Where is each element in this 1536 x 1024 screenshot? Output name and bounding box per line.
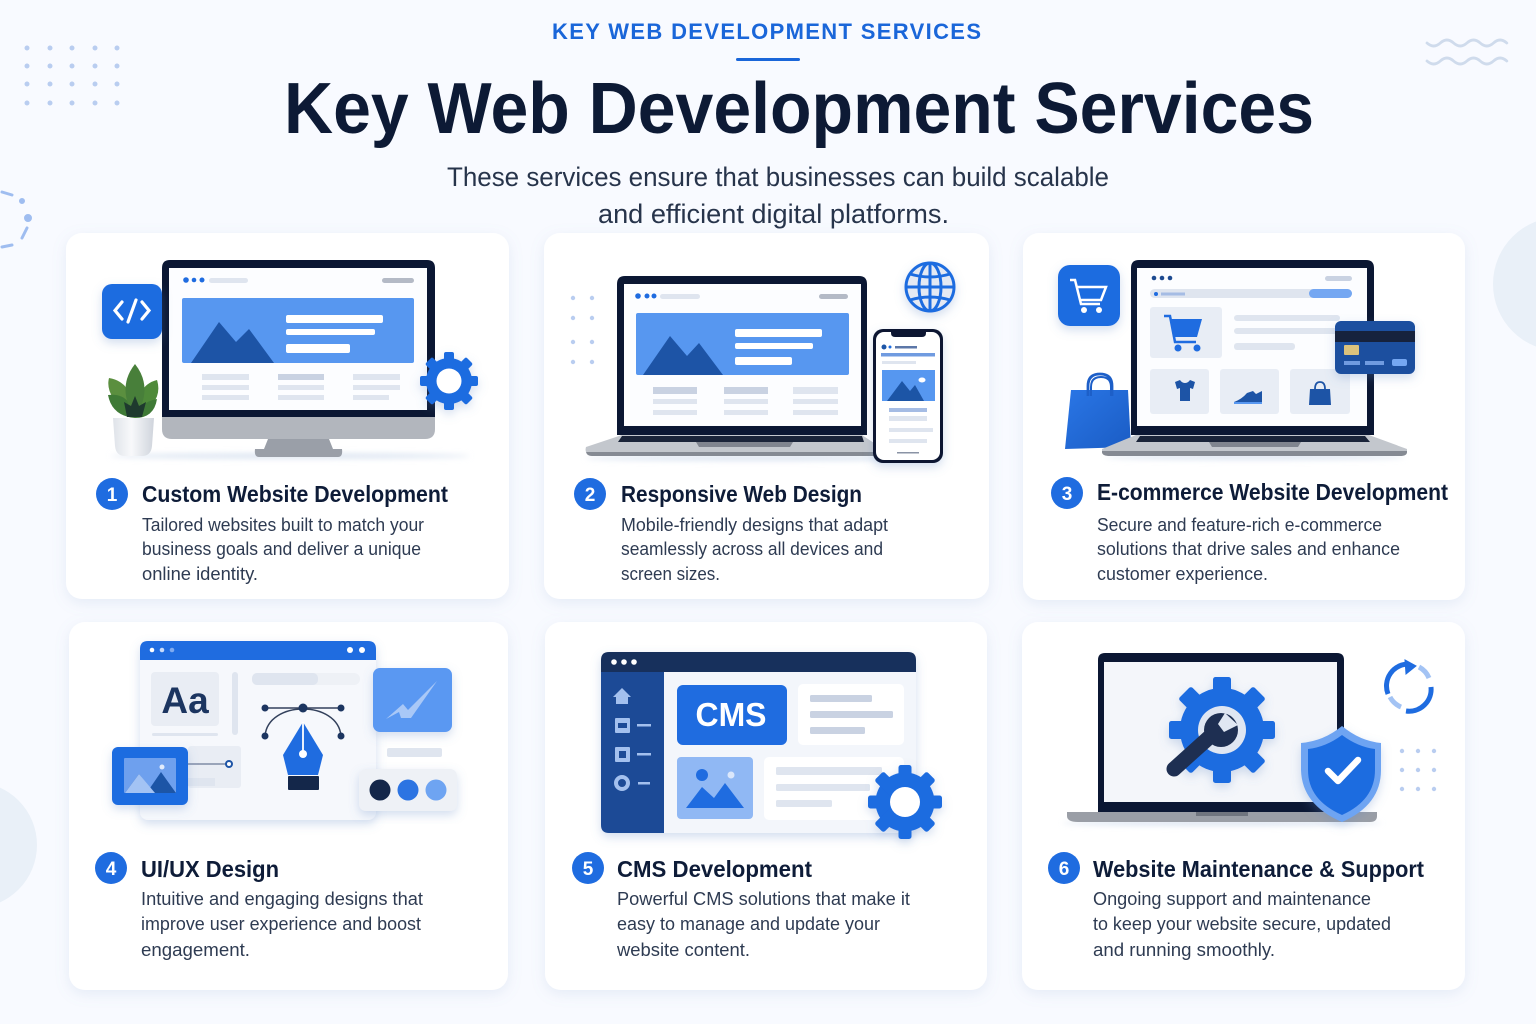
card background (1022, 622, 1465, 990)
card description: business goals and deliver a unique (142, 539, 421, 559)
decorative dot grid top left (24, 46, 120, 106)
illustration: shopping bag (1065, 374, 1131, 449)
card description: customer experience. (1097, 564, 1268, 584)
illustration: desktop monitor (162, 260, 435, 457)
card description: online identity. (142, 564, 258, 584)
card description (621, 515, 888, 584)
content block top (798, 684, 904, 745)
cms badge (677, 685, 787, 745)
card description: improve user experience and boost (141, 914, 421, 934)
number badge 1: 1 (107, 485, 118, 506)
icon: globe (906, 263, 954, 311)
floor shadow (1105, 454, 1405, 460)
card description: screen sizes. (621, 564, 720, 584)
card description (141, 889, 423, 960)
card description: and running smoothly. (1093, 940, 1275, 960)
number badge 2 (574, 478, 606, 510)
card background (545, 622, 987, 990)
number badge 1 (96, 478, 128, 510)
color palette (359, 769, 457, 811)
icon: code tag (102, 284, 162, 339)
eyebrow underline (736, 58, 800, 61)
card description: to keep your website secure, updated (1093, 914, 1391, 934)
card description: Powerful CMS solutions that make it (617, 889, 910, 909)
card background (544, 233, 989, 599)
panel: cms development (545, 622, 987, 990)
icon: gear (868, 765, 942, 839)
number badge 5 (572, 852, 604, 884)
card description: Intuitive and engaging designs that (141, 889, 423, 909)
subtitle: and efficient digital platforms. (598, 199, 949, 229)
icon: gear with wrench (1169, 677, 1275, 783)
card description (1097, 515, 1400, 584)
number badge 3: 3 (1062, 484, 1072, 505)
floor shadow (110, 454, 470, 458)
floor shadow (1062, 820, 1382, 826)
icon: cart badge (1058, 265, 1120, 326)
sidebar icons (613, 688, 651, 789)
floor shadow (585, 456, 935, 460)
card background (66, 233, 509, 599)
number badge 3 (1051, 477, 1083, 509)
panel: website maintenance and support (1022, 622, 1465, 990)
icon: check tile (373, 668, 452, 732)
decorative dots (1400, 749, 1436, 791)
card description: Secure and feature-rich e-commerce (1097, 515, 1382, 535)
image tile (677, 757, 753, 819)
icon: shield check (1301, 726, 1381, 822)
number badge 5: 5 (583, 859, 594, 880)
decorative waves top right (1427, 40, 1507, 64)
illustration: laptop (1102, 260, 1407, 456)
card description: Mobile-friendly designs that adapt (621, 515, 888, 535)
subtitle: These services ensure that businesses can build scalable (447, 162, 1109, 192)
number badge 6: 6 (1059, 859, 1069, 880)
number badge 2: 2 (585, 485, 595, 506)
decorative dashed ring left (2, 192, 30, 247)
card description: engagement. (141, 940, 250, 960)
panel: custom website development (66, 233, 509, 599)
card description: seamlessly across all devices and (621, 539, 883, 559)
card description (142, 515, 424, 584)
main title: Key Web Development Services (284, 69, 1314, 149)
card title: E-commerce Website Development (1097, 479, 1448, 505)
subtitle (447, 162, 1109, 229)
panel: responsive web design (544, 233, 989, 599)
icon: bezier pen tool (262, 704, 344, 790)
card description (1093, 889, 1391, 960)
icon: potted plant (108, 364, 158, 456)
cms badge: CMS (696, 696, 766, 733)
panel: e-commerce website development (1023, 233, 1465, 600)
icon: gear (420, 352, 478, 410)
illustration: design window: Aa (161, 680, 209, 721)
illustration: laptop (1067, 653, 1377, 822)
eyebrow heading: KEY WEB DEVELOPMENT SERVICES (552, 19, 981, 44)
number badge 4: 4 (106, 859, 117, 880)
decorative circle right (1493, 217, 1536, 351)
connector line (188, 761, 232, 767)
card title: CMS Development (617, 856, 812, 882)
icon: credit card (1335, 321, 1415, 374)
card description: Ongoing support and maintenance (1093, 889, 1371, 909)
card description: easy to manage and update your (617, 914, 880, 934)
illustration: laptop (586, 276, 880, 456)
illustration: cms window (601, 652, 916, 833)
card description: Tailored websites built to match your (142, 515, 424, 535)
icon: refresh loop (1386, 660, 1431, 711)
card description: website content. (616, 940, 750, 960)
panel: ui/ux design (69, 622, 508, 990)
card title: Website Maintenance & Support (1093, 856, 1424, 882)
decorative circle left (0, 782, 37, 908)
number badge 4 (95, 852, 127, 884)
number badge 6 (1048, 852, 1080, 884)
card title: UI/UX Design (141, 856, 279, 882)
card description (616, 889, 910, 960)
illustration: smartphone (873, 329, 943, 463)
card title: Custom Website Development (142, 481, 448, 507)
decorative dots (571, 296, 594, 364)
content block bottom (764, 757, 904, 820)
grey label bar (387, 748, 442, 757)
illustration: design window (140, 641, 376, 820)
card description: solutions that drive sales and enhance (1097, 539, 1400, 559)
card title: Responsive Web Design (621, 481, 862, 507)
image tile (112, 747, 188, 805)
card background (69, 622, 508, 990)
card background (1023, 233, 1465, 600)
